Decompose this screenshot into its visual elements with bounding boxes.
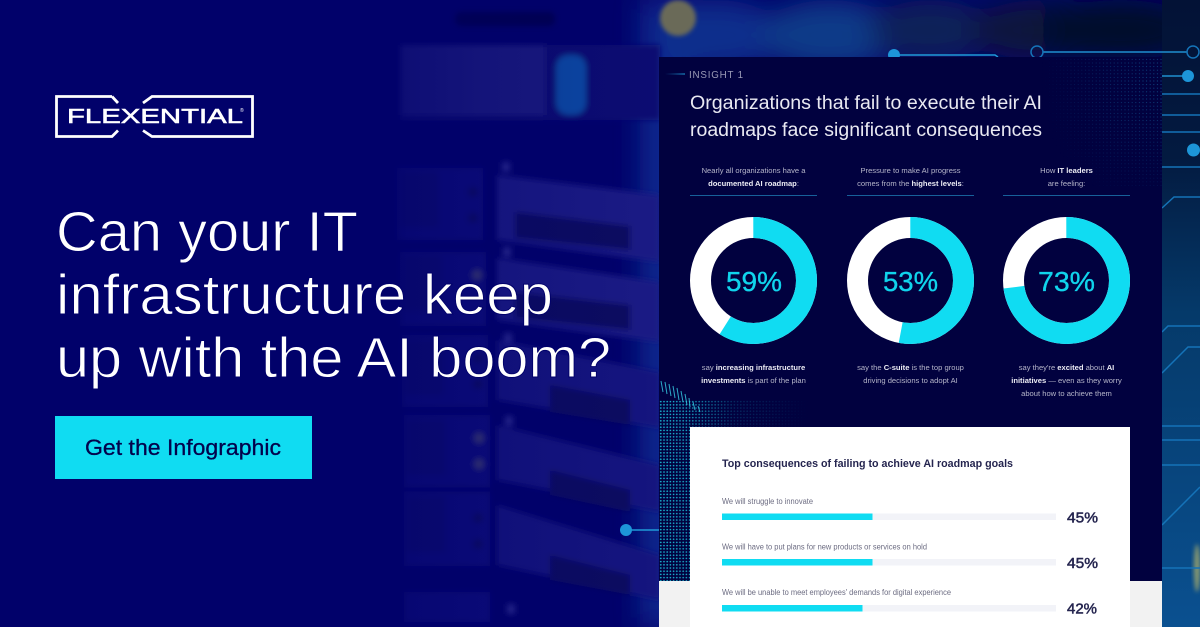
column 1: 59% roadmap stat [690, 166, 817, 385]
column 2: 53% C-suite stat [847, 166, 974, 385]
donut: 53% [858, 228, 964, 334]
insight label [665, 70, 744, 81]
column 1: 59% roadmap stat: say increasing infrastructure [702, 363, 805, 372]
column 2: 53% C-suite stat: driving decisions to adopt AI [863, 376, 958, 385]
column 1: 59% roadmap stat: documented AI roadmap: [708, 179, 799, 188]
donut: 73%: 73% [1038, 266, 1095, 297]
column 3: 73% excited stat: say they're excited about AI [1019, 363, 1114, 372]
button: Get the Infographic [55, 416, 312, 479]
donut: 59% [700, 228, 806, 334]
panel: insight 1 [659, 57, 1162, 627]
bar: plans on hold 45%: We will have to put plans for new products or services on hold [722, 542, 927, 552]
donut: 59%: 59% [726, 266, 782, 297]
column 3: 73% excited stat: about how to achieve them [1021, 389, 1112, 398]
panel title: roadmaps face significant consequences [690, 120, 1042, 141]
column 3: 73% excited stat [1003, 166, 1130, 398]
bar: employee demands 42% [722, 588, 1097, 618]
headline: up with the AI boom? [56, 326, 611, 390]
headline [56, 200, 611, 390]
column 2: 53% C-suite stat: Pressure to make AI progress [860, 166, 961, 175]
column 2: 53% C-suite stat: comes from the highest levels: [857, 179, 964, 188]
bar: plans on hold 45% [722, 542, 1098, 572]
bar: struggle to innovate 45% [722, 497, 1098, 526]
button: Get the Infographic: Get the Infographic [85, 435, 281, 460]
column 2: 53% C-suite stat: say the C-suite is the top group [857, 363, 964, 372]
column 3: 73% excited stat: initiatives — even as they worry [1011, 376, 1122, 385]
bar: plans on hold 45%: 45% [1067, 555, 1098, 572]
column 1: 59% roadmap stat: investments is part of the plan [701, 376, 806, 385]
bar: employee demands 42%: 42% [1067, 600, 1097, 618]
card: top consequences bar chart: Top consequences of failing to achieve AI roadmap goals [722, 458, 1013, 470]
bar: employee demands 42%: We will be unable to meet employees' demands for digital experience [722, 588, 951, 597]
column 1: 59% roadmap stat: Nearly all organizations have a [702, 166, 806, 175]
logo: Flexential: ® [240, 107, 244, 114]
column 3: 73% excited stat: are feeling: [1048, 179, 1085, 188]
logo: Flexential [56, 96, 252, 136]
donut: 53%: 53% [883, 266, 938, 297]
panel title: Organizations that fail to execute their AI [690, 93, 1042, 114]
circuit lines and nodes [620, 46, 1200, 568]
column 3: 73% excited stat: How IT leaders [1040, 166, 1093, 175]
donut: 73% [1014, 228, 1120, 334]
card: top consequences bar chart [690, 427, 1130, 627]
headline: Can your IT [56, 200, 358, 264]
panel title [690, 93, 1042, 141]
bar: struggle to innovate 45%: We will struggle to innovate [722, 497, 813, 506]
headline: infrastructure keep [56, 263, 553, 327]
bar: struggle to innovate 45%: 45% [1067, 510, 1098, 526]
insight label: INSIGHT 1 [689, 70, 744, 81]
logo: Flexential: FLEXENTIAL [67, 106, 243, 128]
